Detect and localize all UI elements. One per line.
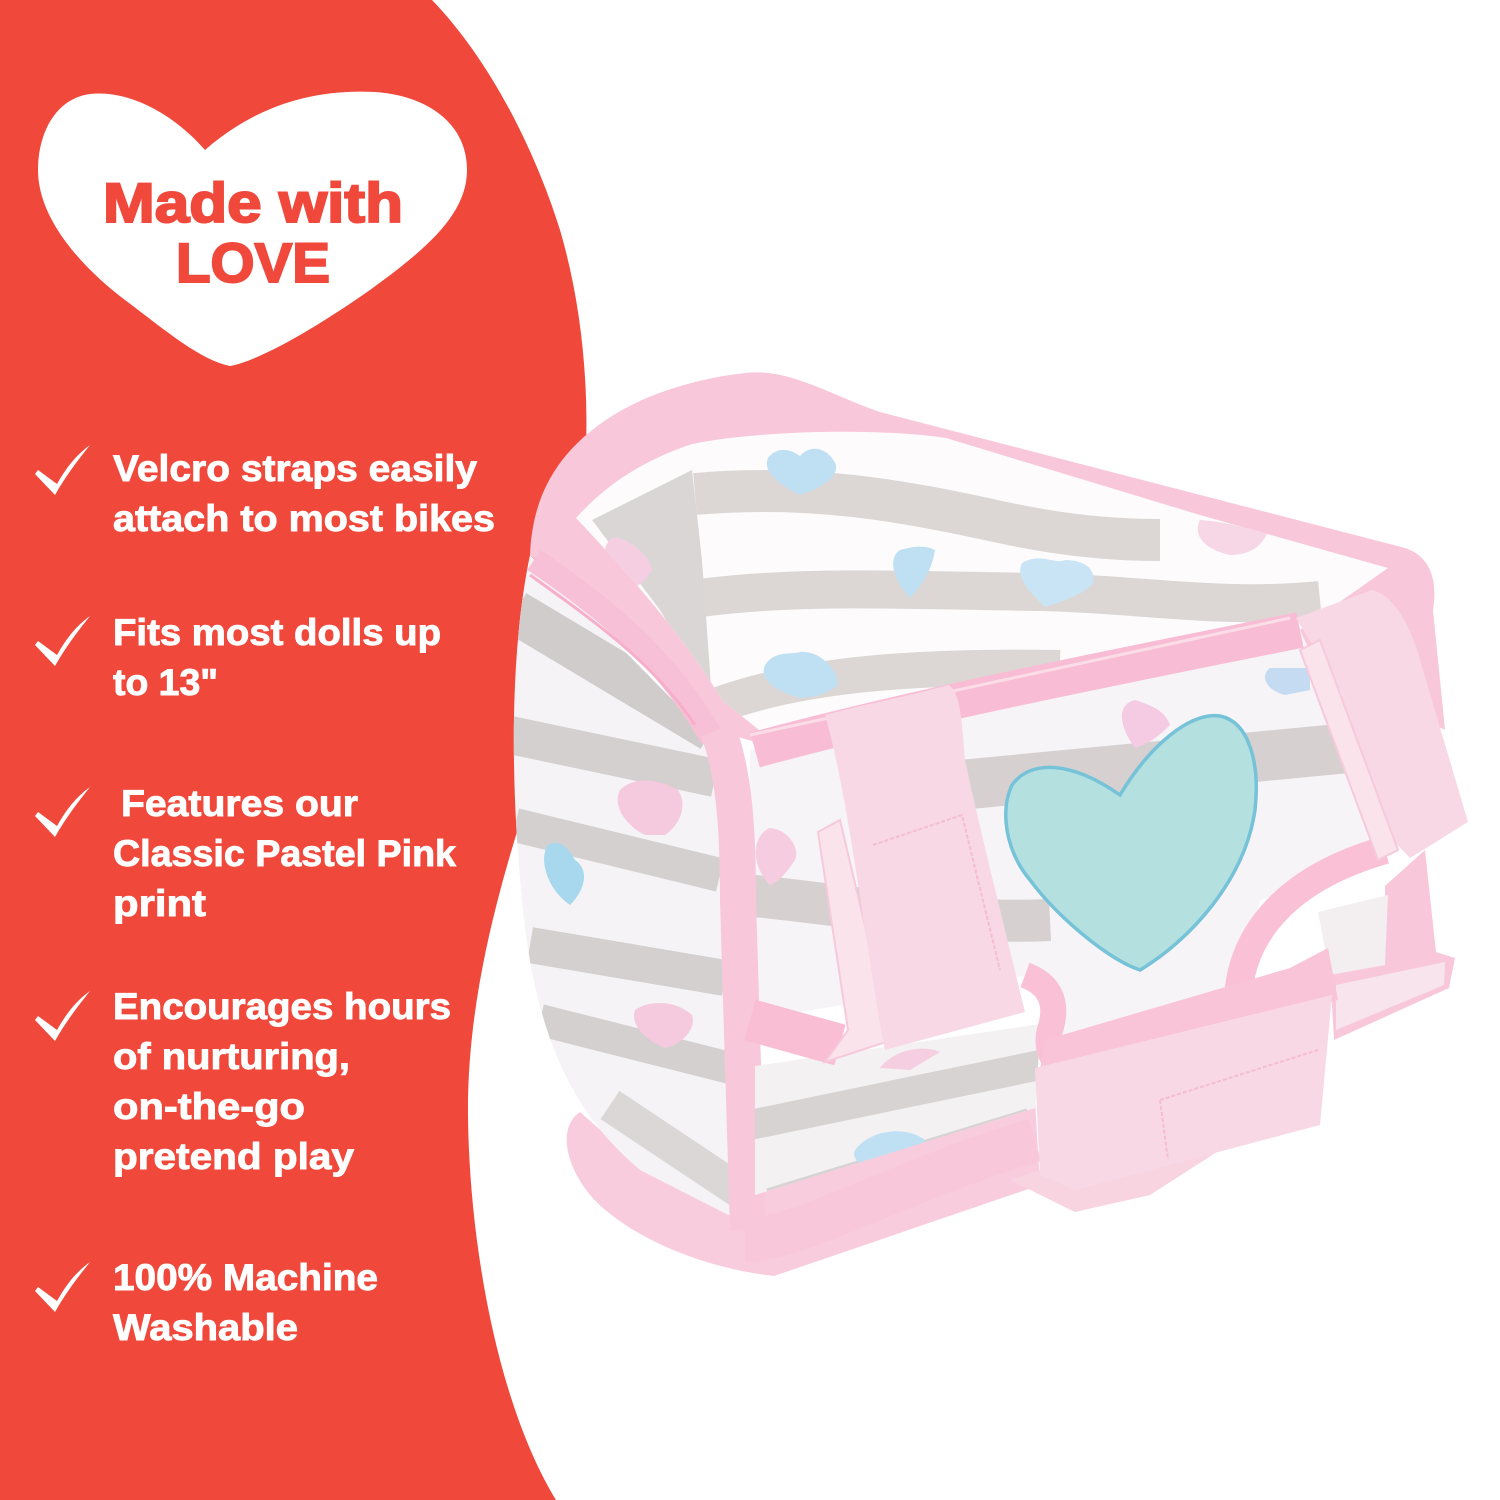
left side panel <box>514 555 730 1216</box>
front corner post binding <box>718 730 748 1230</box>
feature: machine washable <box>35 1257 378 1348</box>
feature: classic pastel pink print: print <box>113 883 206 924</box>
feature: pretend play <box>35 986 451 1177</box>
heading: Made with LOVE: LOVE <box>176 231 330 294</box>
lower opening floor <box>750 1024 1041 1200</box>
heading: Made with LOVE: Made with <box>103 171 403 234</box>
right top strap <box>1296 590 1468 860</box>
feature: fits most dolls: to 13" <box>113 662 218 703</box>
feature: machine washable: Washable <box>113 1307 298 1348</box>
bottom flap <box>567 1100 1040 1276</box>
feature: pretend play: pretend play <box>113 1136 354 1177</box>
heading: Made with LOVE <box>103 171 403 294</box>
lower front binding <box>750 1020 840 1045</box>
feature: velcro straps: Velcro straps easily <box>113 448 477 489</box>
rear right post and band <box>1318 850 1455 1040</box>
feature: fits most dolls: Fits most dolls up <box>113 612 441 653</box>
feature: fits most dolls <box>35 612 441 703</box>
back rim <box>530 372 1445 745</box>
feature: pretend play: Encourages hours <box>113 986 451 1027</box>
front panel <box>750 630 1400 1040</box>
feature: pretend play: of nurturing, <box>113 1036 350 1077</box>
left panel binding <box>534 560 712 738</box>
heart badge <box>38 92 467 366</box>
feature: pretend play: on-the-go <box>113 1086 305 1127</box>
feature: classic pastel pink print: Classic Pastel Pink <box>113 833 456 874</box>
feature: classic pastel pink print: Features our <box>121 783 358 824</box>
feature: classic pastel pink print <box>35 783 456 924</box>
feature: velcro straps: attach to most bikes <box>113 498 495 539</box>
inner back panel <box>576 432 1388 730</box>
underside shadow <box>1010 1150 1220 1212</box>
left front strap <box>818 685 1025 1062</box>
product: doll bike seat <box>500 372 1468 1276</box>
lower front strap <box>1035 948 1338 1190</box>
front top binding <box>755 630 1300 750</box>
feature: velcro straps <box>35 445 495 539</box>
feature list <box>35 445 495 1348</box>
red background panel <box>0 0 586 1500</box>
feature: machine washable: 100% Machine <box>113 1257 378 1298</box>
heart appliqué <box>1006 716 1256 970</box>
